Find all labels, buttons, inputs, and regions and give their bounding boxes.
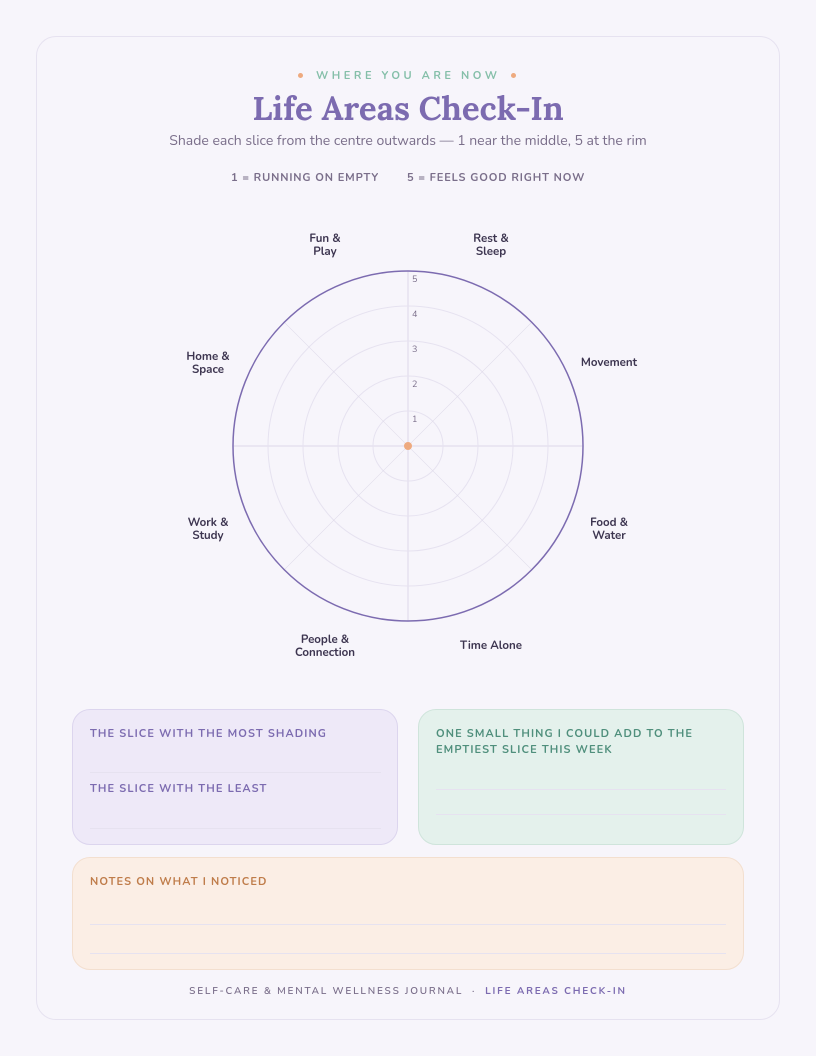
label: people and connection: Connection (295, 645, 355, 661)
scale numbers: 2 (412, 379, 417, 391)
heading: one small thing (436, 726, 693, 757)
footer: SELF-CARE & MENTAL WELLNESS JOURNAL · LIFE AREAS CHECK-IN (189, 984, 627, 998)
label: work and study (188, 515, 228, 544)
label: food and water (590, 515, 628, 544)
scale numbers (412, 274, 418, 426)
label: fun and play (309, 231, 341, 260)
scale numbers: 4 (412, 309, 418, 321)
label: home and space (186, 349, 230, 378)
writing line (90, 924, 726, 925)
wheel chart (232, 270, 584, 622)
writing line (436, 789, 726, 790)
label: movement: Movement (581, 355, 637, 371)
scale numbers: 5 (412, 274, 417, 286)
panel: one small thing (418, 709, 744, 845)
label: food and water: Food & (590, 515, 628, 531)
subtitle: Shade each slice from the centre outwards — 1 near the middle, 5 at the rim (169, 131, 647, 150)
label: rest and sleep: Rest & (473, 231, 509, 247)
writing line (90, 772, 381, 773)
scale legend (231, 170, 585, 185)
writing line (90, 953, 726, 954)
scale legend: 5 = FEELS GOOD RIGHT NOW (407, 170, 585, 185)
heading: one small thing: EMPTIEST SLICE THIS WEEK (436, 742, 613, 757)
panel: most and least shading (72, 709, 398, 845)
outer rim (233, 271, 583, 621)
label: home and space: Space (192, 362, 224, 378)
label: rest and sleep (473, 231, 509, 260)
label: fun and play: Play (313, 244, 337, 260)
centre dot (404, 442, 412, 450)
label: home and space: Home & (186, 349, 230, 365)
spokes (233, 271, 583, 621)
label: time alone: Time Alone (460, 638, 522, 654)
label: people and connection (295, 632, 355, 661)
label: work and study: Study (192, 528, 224, 544)
writing line (90, 828, 381, 829)
heading: most shading: THE SLICE WITH THE MOST SHADING (90, 726, 327, 741)
label: fun and play: Fun & (309, 231, 341, 247)
title: Life Areas Check-In (252, 88, 564, 130)
scale legend: 1 = RUNNING ON EMPTY (231, 170, 379, 185)
panel: notes (72, 857, 744, 970)
label: work and study: Work & (188, 515, 228, 531)
heading: notes: NOTES ON WHAT I NOTICED (90, 874, 267, 889)
label: food and water: Water (592, 528, 626, 544)
label: rest and sleep: Sleep (476, 244, 506, 260)
heading: one small thing: ONE SMALL THING I COULD ADD TO THE (436, 726, 693, 741)
eyebrow: where you are now: WHERE YOU ARE NOW (316, 68, 500, 83)
rings (268, 306, 548, 586)
heading: least shading: THE SLICE WITH THE LEAST (90, 781, 267, 796)
scale numbers: 3 (412, 344, 417, 356)
writing line (436, 814, 726, 815)
scale numbers: 1 (412, 414, 417, 426)
label: people and connection: People & (301, 632, 349, 648)
